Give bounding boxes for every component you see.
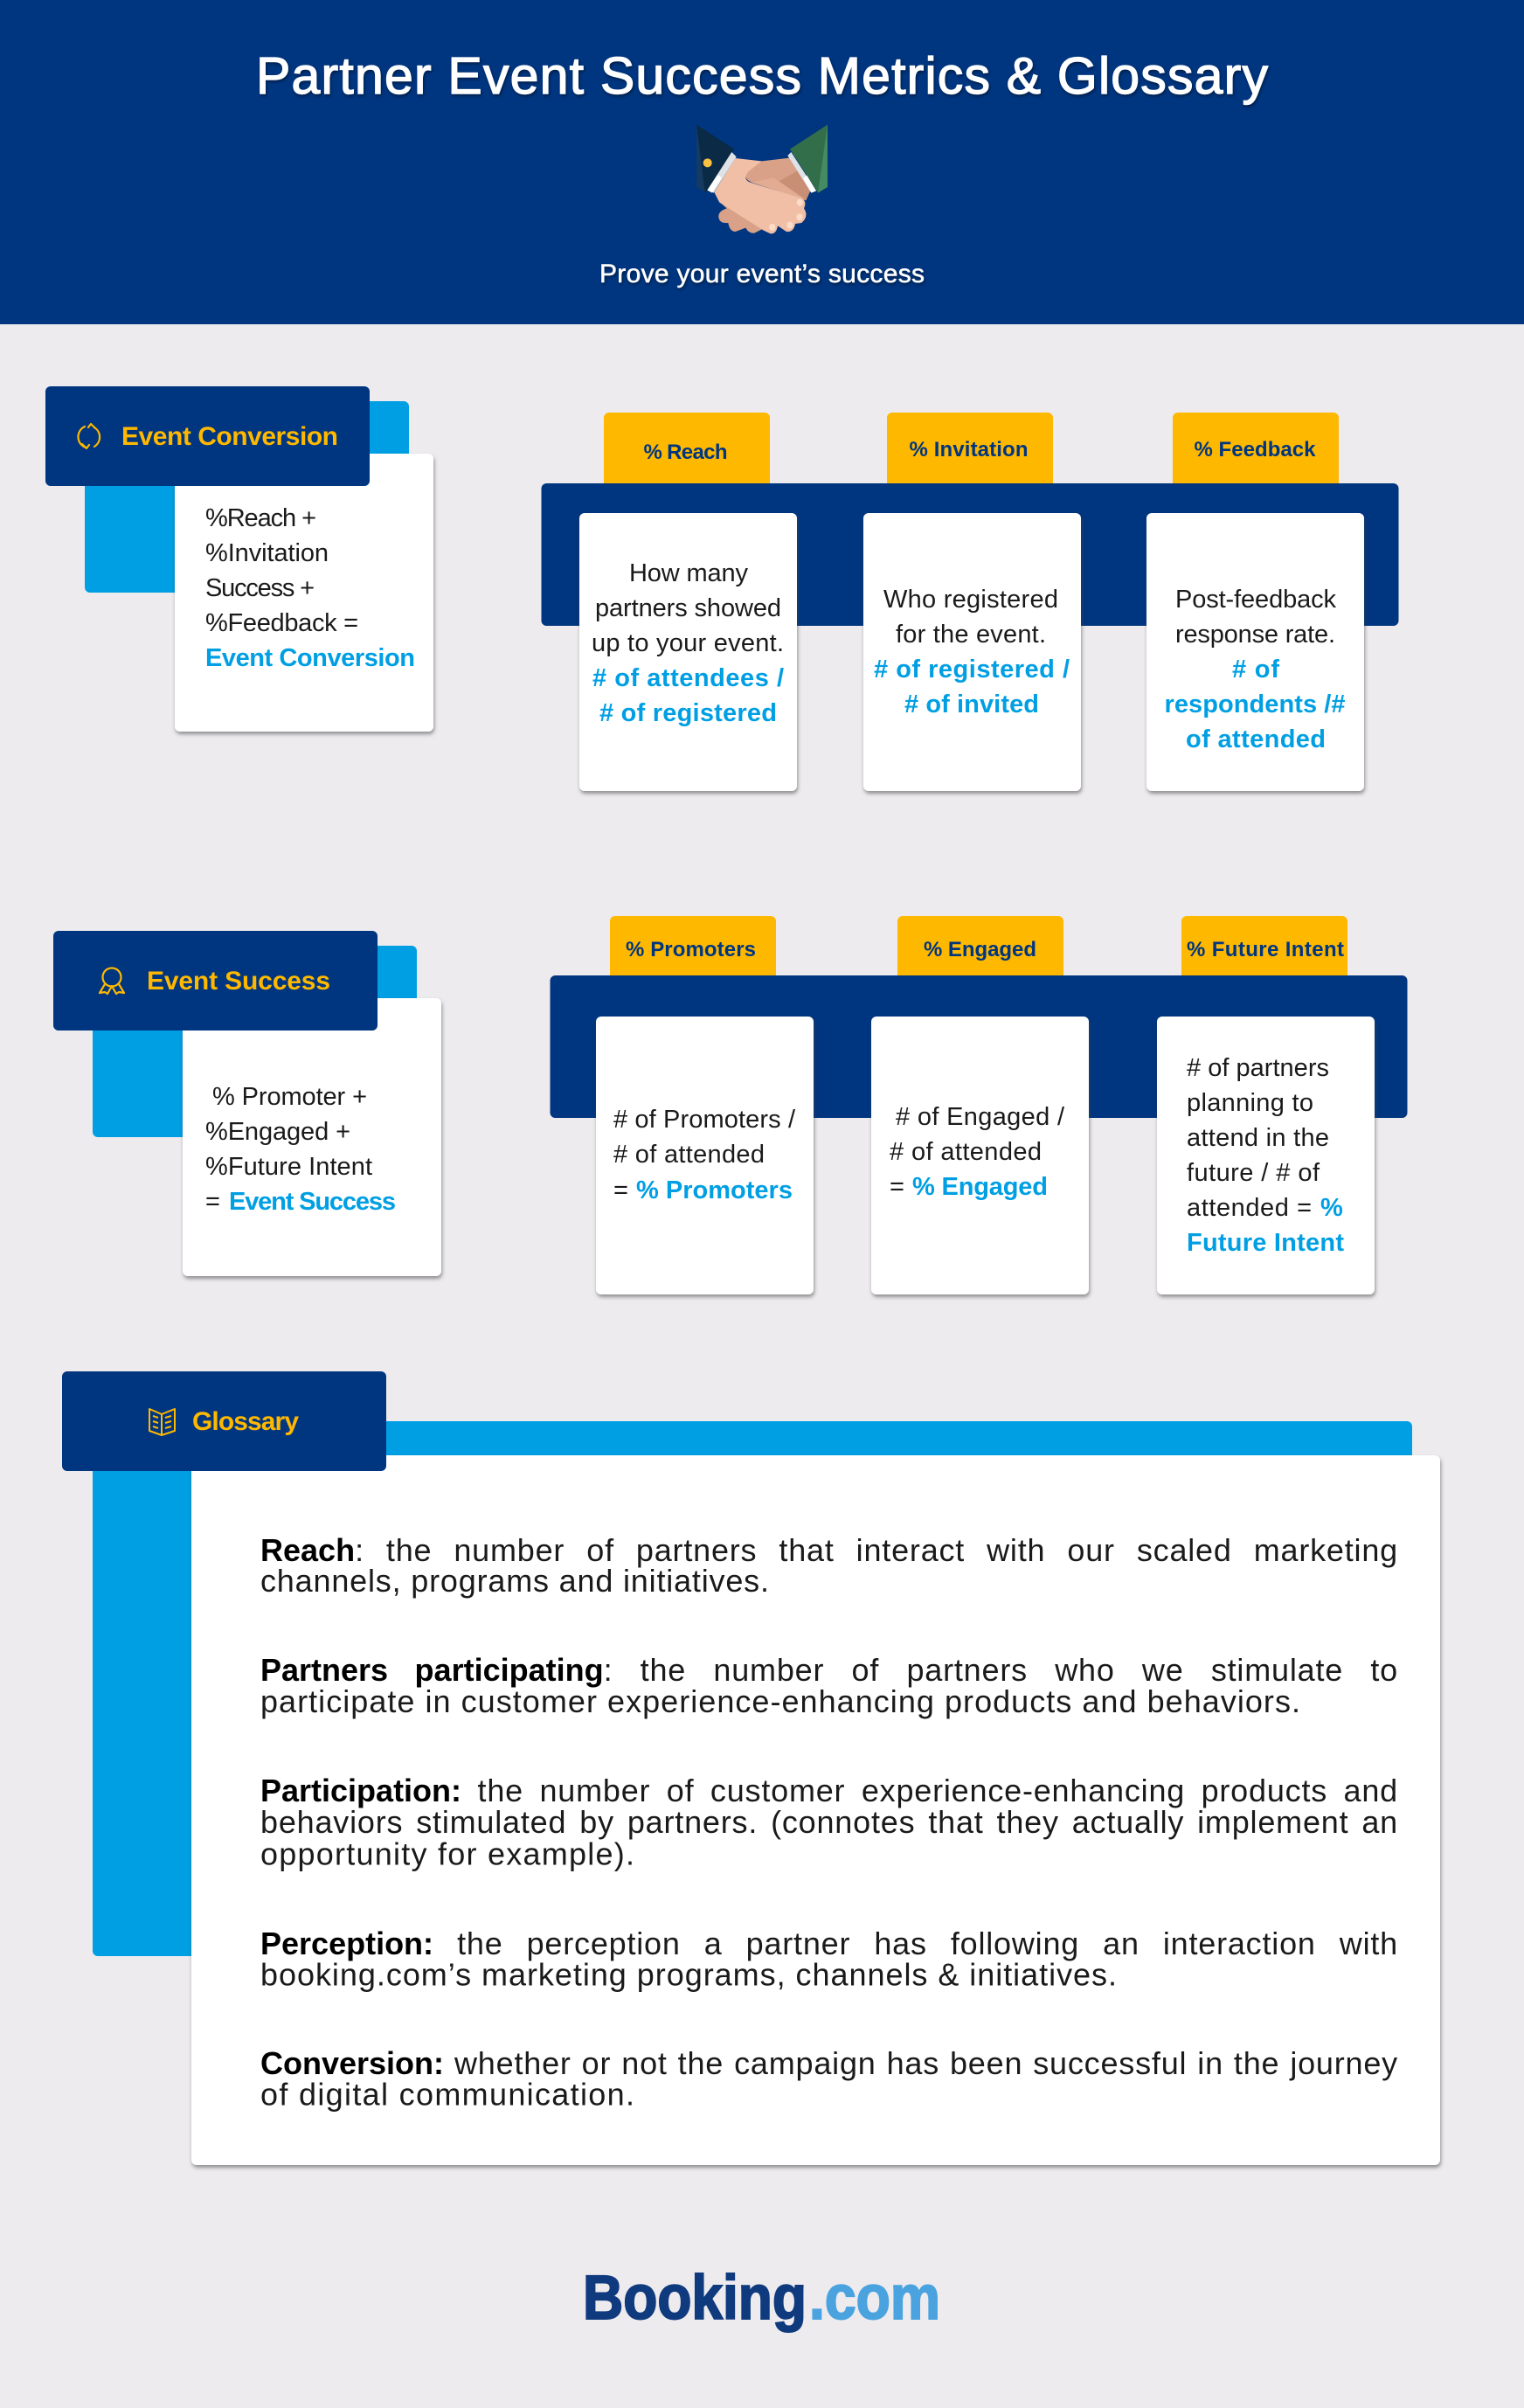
card: reach: up to your event. [592, 629, 784, 657]
title: Partner Event Success Metrics & Glossary [256, 47, 1269, 105]
card: engaged: # of attended [890, 1138, 1042, 1166]
card: engaged: % Engaged [912, 1173, 1048, 1201]
definition: partners participating: participate in customer experience-enhancing products and behaviors. [260, 1683, 1300, 1719]
card: reach: # of attendees / [592, 664, 784, 692]
definition: participation: Participation: the number of customer experience-enhancing products and [260, 1773, 1398, 1808]
heading: event success: Event Success [147, 967, 330, 996]
panel: event conversion formula [45, 386, 433, 732]
definition: perception [260, 1926, 1398, 1993]
tab: reach: % Reach [643, 441, 727, 464]
heading: glossary [62, 1371, 386, 1471]
tab: promoters [610, 916, 776, 995]
formula card: %Future Intent [205, 1153, 372, 1181]
tab: engaged [897, 916, 1063, 995]
tab: feedback: % Feedback [1194, 438, 1316, 461]
card: engaged: = [890, 1173, 904, 1201]
formula card: Event Success [229, 1188, 396, 1216]
formula card: = [205, 1188, 220, 1216]
logo: Booking.com: .com [809, 2264, 940, 2333]
tab: engaged: % Engaged [924, 938, 1036, 961]
card: invitation: # of invited [904, 690, 1039, 718]
definition: participation: behaviors stimulated by partners. (connotes that they actually implement an [260, 1805, 1398, 1840]
panel: event success metrics [551, 916, 1407, 1294]
card: future intent [1157, 1017, 1375, 1294]
card: future intent: attended = [1187, 1194, 1312, 1222]
heading: event success [53, 931, 378, 1031]
card: promoters: = [613, 1176, 628, 1204]
card: feedback: respondents /# [1164, 690, 1346, 718]
definition: reach: Reach: the number of partners that interact with our scaled marketing [260, 1533, 1398, 1568]
formula card: %Engaged + [205, 1118, 350, 1146]
definition: conversion: of digital communication. [260, 2077, 634, 2112]
card: future intent: % [1320, 1194, 1343, 1222]
card: invitation: Who registered [883, 586, 1058, 614]
formula card: %Invitation [205, 539, 329, 567]
definition: reach [260, 1533, 1398, 1599]
card: engaged: # of Engaged / [896, 1103, 1065, 1131]
formula card: % Promoter + [212, 1083, 367, 1111]
tab: promoters: % Promoters [626, 938, 756, 961]
card: future intent: future / # of [1187, 1159, 1320, 1187]
logo: Booking.com: Booking [583, 2264, 807, 2333]
formula card: %Feedback = [205, 609, 358, 637]
card: feedback: # of [1232, 656, 1279, 684]
panel: event success formula [53, 931, 441, 1276]
card: future intent: # of partners [1187, 1054, 1329, 1082]
card: invitation: # of registered / [874, 656, 1070, 684]
definition: partners participating: Partners participating: the number of partners who we stimulate to [260, 1652, 1398, 1687]
tab: future intent [1181, 916, 1347, 995]
card: reach: # of registered [599, 699, 777, 727]
card: feedback: response rate. [1175, 621, 1335, 649]
definition: partners participating [260, 1652, 1398, 1719]
card: future intent: attend in the [1187, 1124, 1329, 1152]
definition: reach: channels, programs and initiatives. [260, 1563, 769, 1599]
icon: open book [149, 1409, 175, 1435]
card: promoters: # of attended [613, 1141, 765, 1169]
card: promoters: # of Promoters / [613, 1106, 796, 1134]
definition: participation: opportunity for example). [260, 1835, 634, 1872]
card: feedback: of attended [1186, 725, 1326, 753]
formula card: Event Conversion [205, 644, 415, 672]
definition: conversion [260, 2045, 1398, 2112]
icon: award ribbon [100, 968, 124, 994]
tab: invitation: % Invitation [909, 438, 1028, 461]
definition: perception: booking.com’s marketing programs, channels & initiatives. [260, 1956, 1117, 1993]
panel: glossary [62, 1371, 1440, 2165]
card: invitation [863, 513, 1081, 791]
tab: feedback [1173, 413, 1339, 491]
card: feedback: Post-feedback [1175, 586, 1337, 614]
card: future intent: Future Intent [1187, 1229, 1344, 1257]
formula card: %Reach + [205, 504, 316, 532]
card: reach: partners showed [595, 594, 781, 622]
icon: handshake [696, 125, 828, 233]
tab: invitation [887, 413, 1053, 491]
heading: event conversion [45, 386, 370, 486]
tab: future intent: % Future Intent [1187, 938, 1344, 961]
icon: refresh arrows [78, 424, 100, 448]
card: feedback [1146, 513, 1364, 791]
panel: event conversion metrics [542, 413, 1398, 791]
tab: reach [604, 413, 770, 491]
definition: perception: Perception: the perception a partner has following an interaction with [260, 1926, 1398, 1961]
card: future intent: planning to [1187, 1089, 1313, 1117]
heading: event conversion: Event Conversion [121, 422, 338, 451]
definition: participation [260, 1773, 1398, 1872]
definition: conversion: Conversion: whether or not the campaign has been successful in the journey [260, 2045, 1398, 2080]
card: reach: How many [629, 559, 748, 587]
subtitle: Prove your event’s success [599, 260, 925, 288]
card: promoters: % Promoters [636, 1176, 793, 1204]
formula card [175, 454, 433, 732]
card: invitation: for the event. [896, 621, 1046, 649]
card: promoters [596, 1017, 814, 1294]
logo: Booking.com [583, 2264, 940, 2333]
formula card: Success + [205, 574, 315, 602]
card: engaged [871, 1017, 1089, 1294]
card: reach [579, 513, 797, 791]
header banner [0, 0, 1524, 324]
heading: glossary: Glossary [192, 1407, 299, 1436]
formula card [183, 998, 441, 1276]
